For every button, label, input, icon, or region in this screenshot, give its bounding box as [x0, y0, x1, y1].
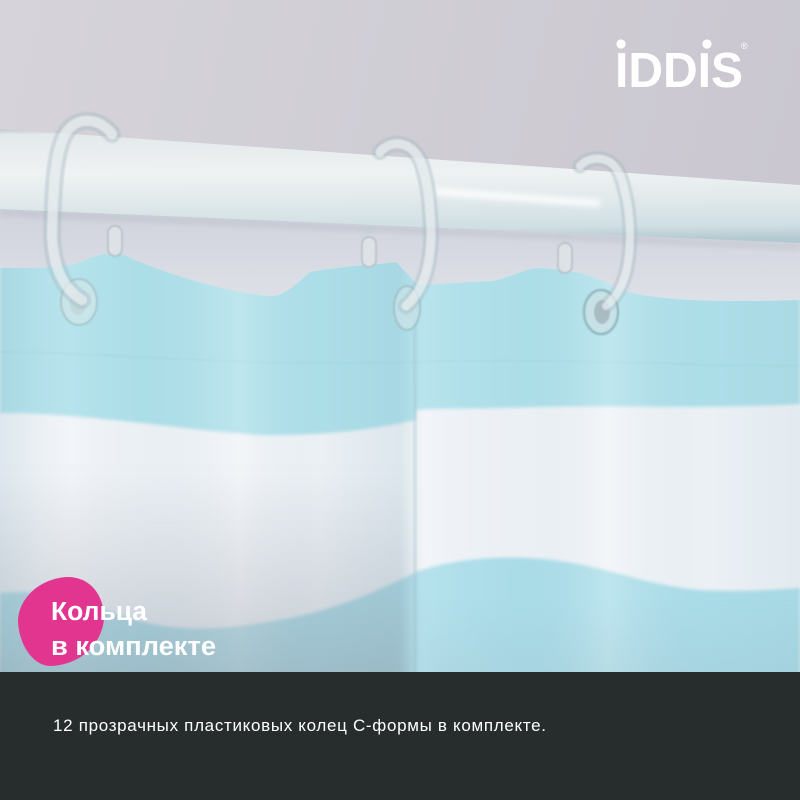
- brand logo: IDDIS: [615, 44, 743, 98]
- panel overlap: [413, 290, 417, 672]
- heading: в комплекте: [51, 633, 216, 661]
- ring 1: [52, 121, 112, 300]
- heading: [51, 598, 216, 661]
- upper blue stripe: [0, 240, 800, 435]
- backdrop behind rod: [0, 205, 800, 330]
- ring 3: [580, 159, 630, 306]
- grommet 3: [584, 290, 618, 334]
- hem seam: [799, 366, 800, 367]
- fabric folds: [0, 240, 800, 672]
- footer band: [0, 672, 800, 800]
- grommet 1: [61, 279, 97, 325]
- shower rod: [0, 129, 800, 243]
- pink blob: [18, 577, 104, 666]
- peg 2: [361, 225, 376, 267]
- peg 3: [558, 234, 572, 273]
- curtain: [0, 240, 800, 700]
- footer description: 12 прозрачных пластиковых колец С-формы в комплекте.: [53, 716, 546, 735]
- bottom shading: [0, 510, 414, 672]
- shadow below rod: [0, 209, 800, 250]
- heading: Кольца: [51, 598, 148, 626]
- grommet 2: [394, 286, 420, 330]
- rod highlight: [435, 188, 600, 207]
- lower blue stripe: [0, 558, 800, 680]
- ring 2: [380, 144, 431, 306]
- peg 1: [108, 212, 126, 256]
- brand logo: ®: [741, 41, 748, 51]
